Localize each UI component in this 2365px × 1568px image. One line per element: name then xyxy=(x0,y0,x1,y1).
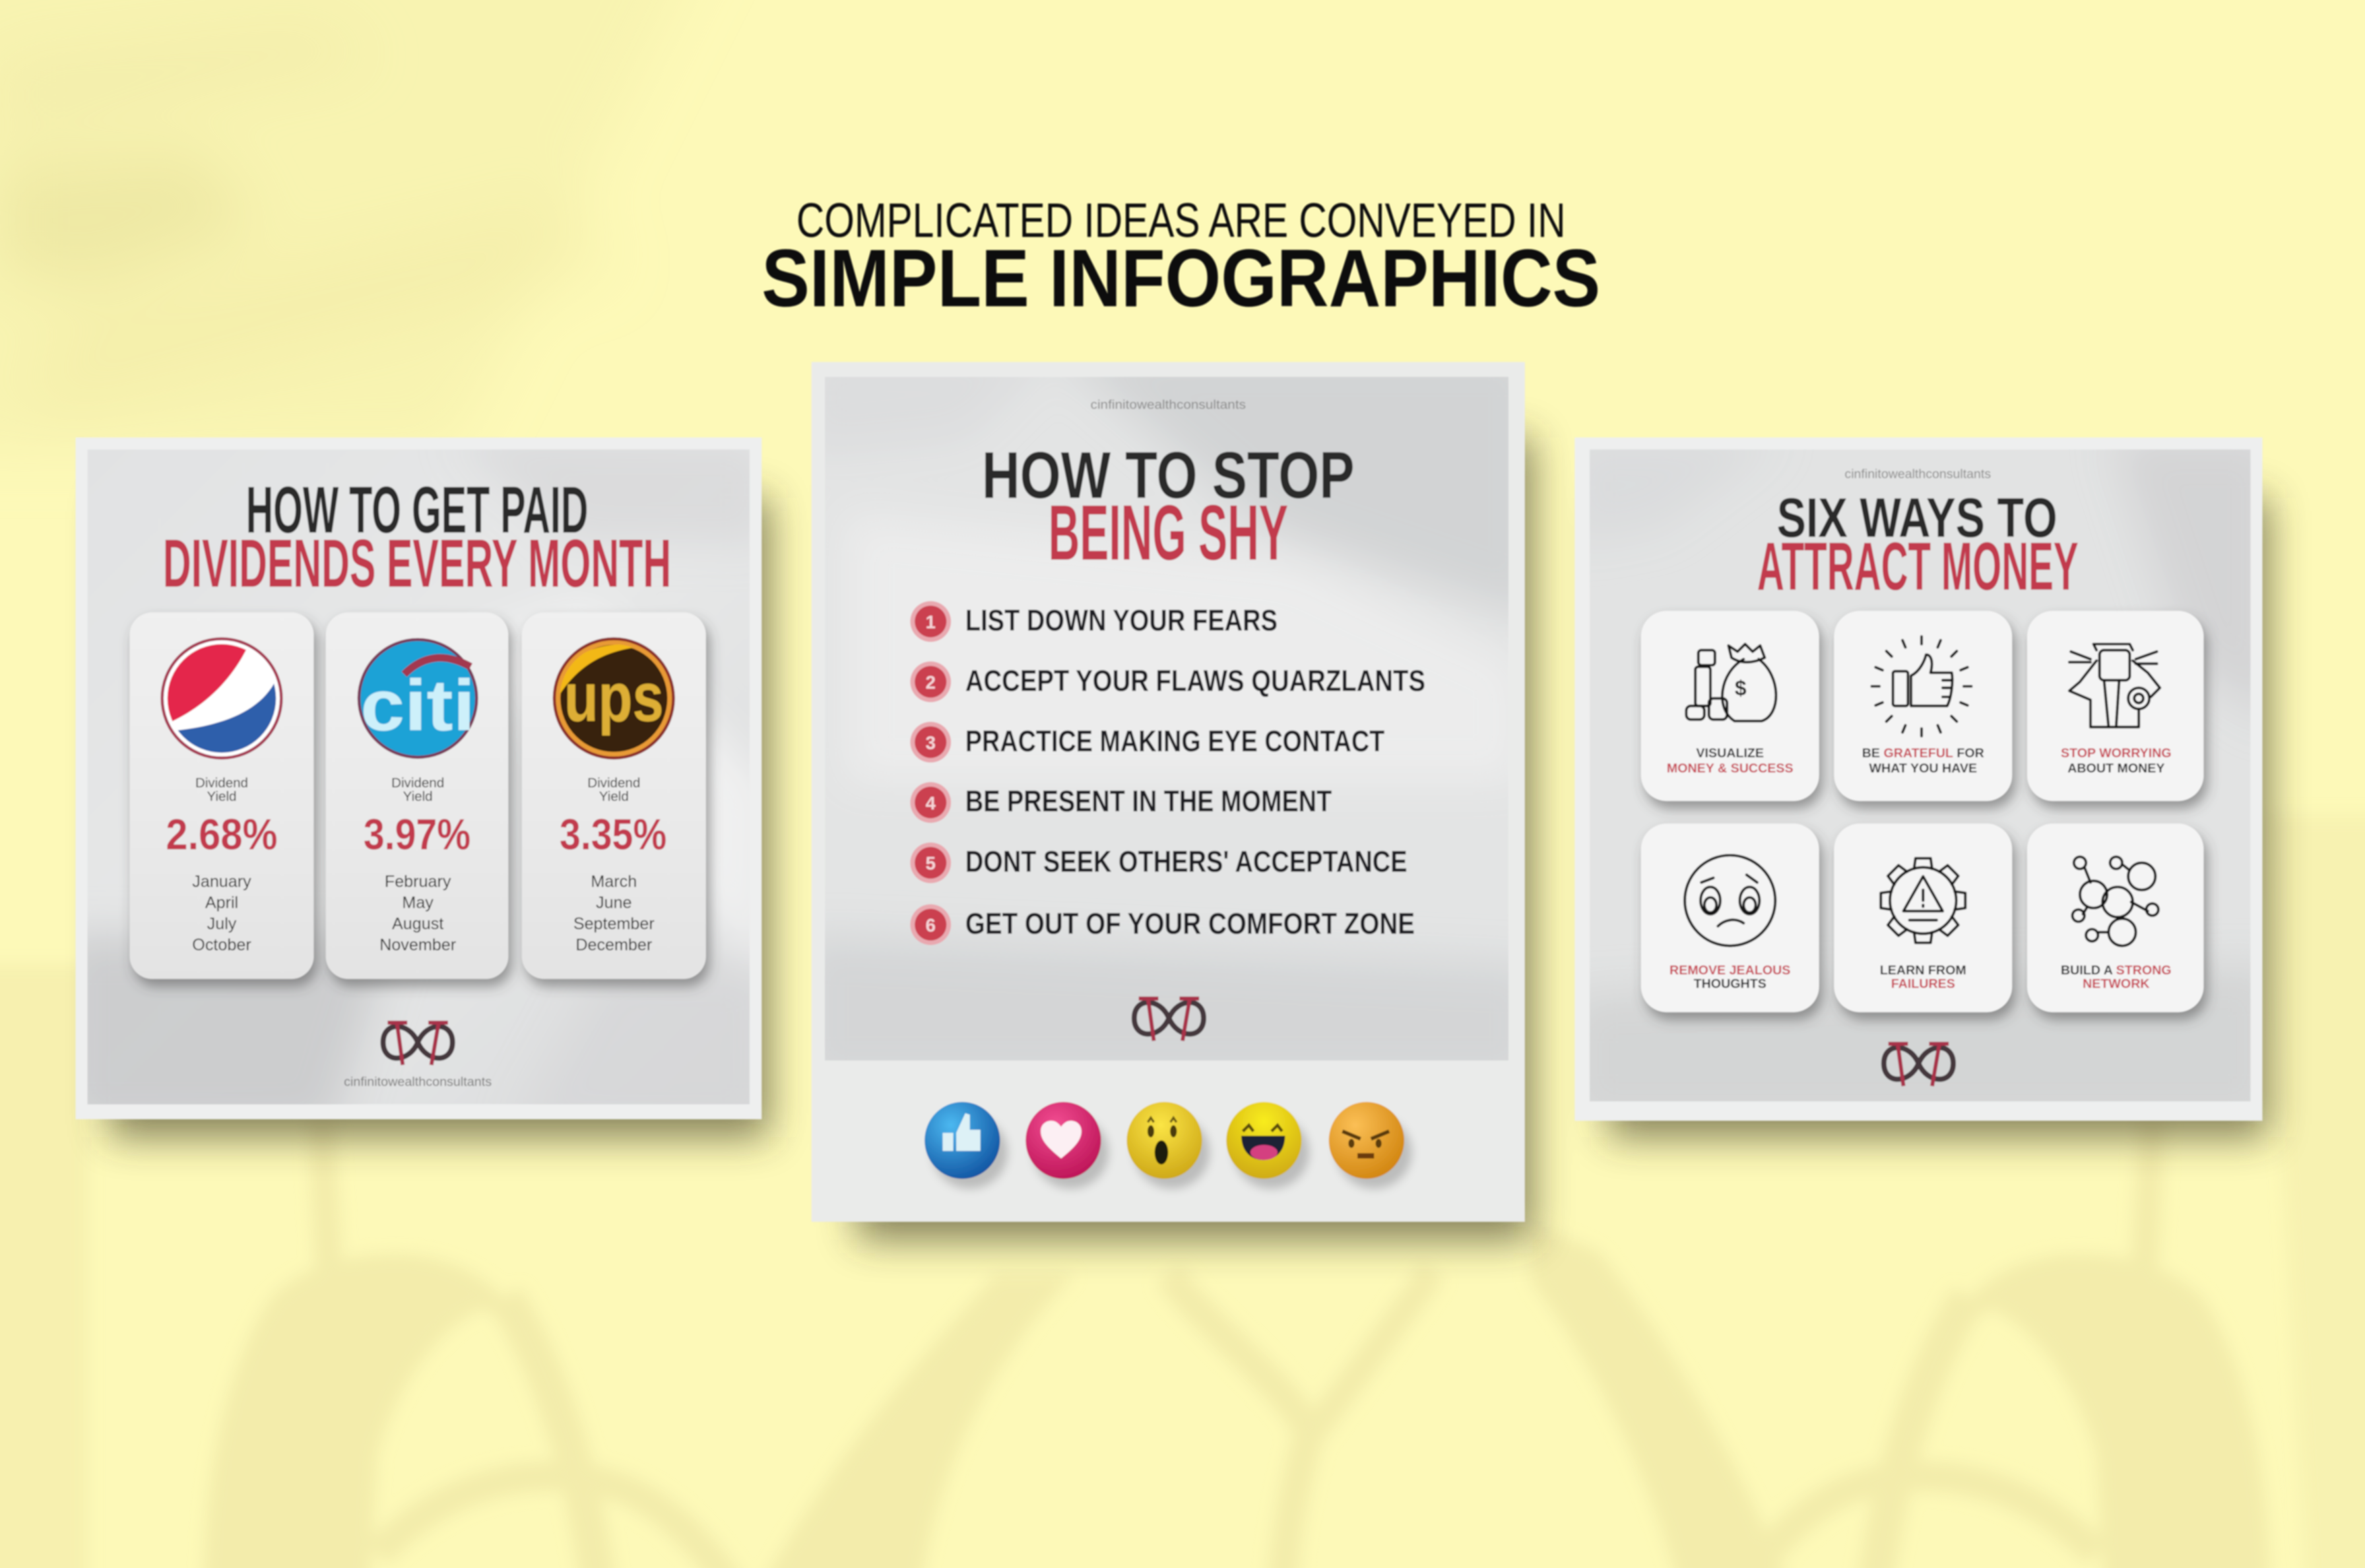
card: stop worrying: ABOUT MONEY xyxy=(2067,761,2165,775)
card: citi: Yield xyxy=(403,789,433,804)
card: citi: Dividend xyxy=(391,775,444,791)
title xyxy=(761,194,1600,324)
card: grateful: WHAT YOU HAVE xyxy=(1869,761,1977,775)
icon: ups logo xyxy=(554,639,674,758)
card: grateful xyxy=(1834,611,2012,801)
card: learn from failures xyxy=(1834,824,2012,1012)
step 3: PRACTICE MAKING EYE CONTACT xyxy=(965,724,1384,758)
icon: gear with warning triangle xyxy=(1881,859,1965,943)
heading: how to get paid: DIVIDENDS EVERY MONTH xyxy=(163,525,671,601)
card: jealous thoughts: THOUGHTS xyxy=(1694,977,1766,991)
card: pepsi xyxy=(130,612,313,979)
card: grateful: BE GRATEFUL FOR xyxy=(1862,746,1984,760)
card: stop worrying xyxy=(2027,611,2203,801)
step 3 xyxy=(910,722,1384,762)
card: citi: May xyxy=(402,894,434,912)
card: citi xyxy=(326,612,508,979)
icon: love xyxy=(1025,1102,1101,1179)
icon: brand logo xyxy=(383,1021,453,1065)
heading: how to get paid xyxy=(163,473,671,601)
card: strong network xyxy=(2027,824,2203,1012)
icon: people network xyxy=(2073,857,2158,946)
step 5: 5 xyxy=(926,853,936,874)
card: citi: February xyxy=(385,872,451,891)
card: strong network: BUILD A STRONG xyxy=(2061,964,2172,978)
card: pepsi: October xyxy=(192,936,251,954)
card: jealous thoughts xyxy=(1641,824,1819,1012)
list: six steps xyxy=(910,601,1425,945)
heading: how to stop: BEING SHY xyxy=(1049,489,1288,577)
step 1: LIST DOWN YOUR FEARS xyxy=(965,603,1278,637)
handle: cinfinitowealthconsultants xyxy=(1844,467,1991,482)
card: strong network: NETWORK xyxy=(2083,977,2150,991)
icon: brand logo xyxy=(1884,1042,1953,1086)
step 3: 3 xyxy=(926,733,936,753)
card: visualize xyxy=(1641,611,1819,801)
card: citi: August xyxy=(392,915,443,933)
step 1 xyxy=(910,601,1278,642)
step 2 xyxy=(910,661,1425,702)
background: palm leaf shadows top left xyxy=(0,0,724,453)
handle: cinfinitowealthconsultants xyxy=(1091,397,1246,412)
card: pepsi: Yield xyxy=(207,789,236,804)
card: ups: March xyxy=(591,872,637,891)
icon: angry xyxy=(1329,1102,1404,1179)
step 5 xyxy=(910,843,1408,883)
icon: citi logo xyxy=(359,639,476,757)
step 6 xyxy=(910,904,1415,945)
card: pepsi: April xyxy=(205,894,238,912)
card: learn from failures: FAILURES xyxy=(1891,977,1955,991)
card: citi: 3.97% xyxy=(364,810,470,859)
panel shadows xyxy=(109,438,2269,1240)
title line 2: SIMPLE INFOGRAPHICS xyxy=(761,233,1600,324)
icon: citi logo: citi xyxy=(360,665,475,746)
step 6: 6 xyxy=(926,915,936,935)
card: ups: Yield xyxy=(599,789,629,804)
card: ups: June xyxy=(596,894,632,912)
card: stop worrying: STOP WORRYING xyxy=(2061,746,2172,760)
heading: how to stop xyxy=(982,438,1355,577)
step 5: DONT SEEK OTHERS' ACCEPTANCE xyxy=(965,845,1408,878)
card: learn from failures: LEARN FROM xyxy=(1880,964,1966,978)
card: ups xyxy=(522,612,706,979)
icon: money bag xyxy=(1686,644,1776,721)
icon: brand logo xyxy=(1134,997,1204,1041)
card: jealous thoughts: REMOVE JEALOUS xyxy=(1669,964,1790,978)
icon: money bag: $ xyxy=(1735,676,1747,700)
card: ups: Dividend xyxy=(587,775,640,791)
handle: cinfinitowealthconsultants xyxy=(344,1075,492,1090)
icon: pepsi logo xyxy=(160,636,284,760)
icon: wow xyxy=(1126,1102,1202,1179)
card: pepsi: January xyxy=(192,872,251,891)
step 4: BE PRESENT IN THE MOMENT xyxy=(965,785,1332,818)
card: ups: December xyxy=(575,936,652,954)
heading: how to stop: HOW TO STOP xyxy=(982,438,1355,512)
card: ups: 3.35% xyxy=(560,810,666,859)
icon: thumbs up with rays xyxy=(1872,637,1971,736)
panel: dividends xyxy=(60,438,769,1131)
icon: haha xyxy=(1226,1102,1302,1179)
card: visualize: VISUALIZE xyxy=(1696,746,1764,760)
background: arch window shadows xyxy=(0,814,2365,1568)
panel: attract money xyxy=(1569,438,2277,1124)
heading: six ways: SIX WAYS TO xyxy=(1777,486,2057,549)
panel: being shy xyxy=(799,347,1538,1222)
heading: six ways xyxy=(1757,486,2079,604)
icon: ups logo: ups xyxy=(564,659,664,736)
step 2: 2 xyxy=(926,672,936,692)
card: pepsi: 2.68% xyxy=(166,810,278,859)
step 4 xyxy=(910,782,1332,823)
icon: worried person xyxy=(2069,644,2160,727)
step 2: ACCEPT YOUR FLAWS QUARZLANTS xyxy=(965,664,1425,698)
step 1: 1 xyxy=(926,612,936,632)
step 6: GET OUT OF YOUR COMFORT ZONE xyxy=(965,907,1415,940)
icon: like xyxy=(924,1102,1000,1179)
card: citi: November xyxy=(379,936,456,954)
card: ups: September xyxy=(573,915,655,933)
title line 1: COMPLICATED IDEAS ARE CONVEYED IN xyxy=(796,194,1566,247)
card: pepsi: July xyxy=(207,915,237,933)
card: pepsi: Dividend xyxy=(195,775,248,791)
reactions row xyxy=(924,1102,1411,1189)
icon: envious face xyxy=(1685,855,1775,946)
heading: how to get paid: HOW TO GET PAID xyxy=(246,473,588,547)
heading: six ways: ATTRACT MONEY xyxy=(1757,529,2079,604)
step 4: 4 xyxy=(926,793,936,813)
card: visualize: MONEY & SUCCESS xyxy=(1667,761,1794,775)
